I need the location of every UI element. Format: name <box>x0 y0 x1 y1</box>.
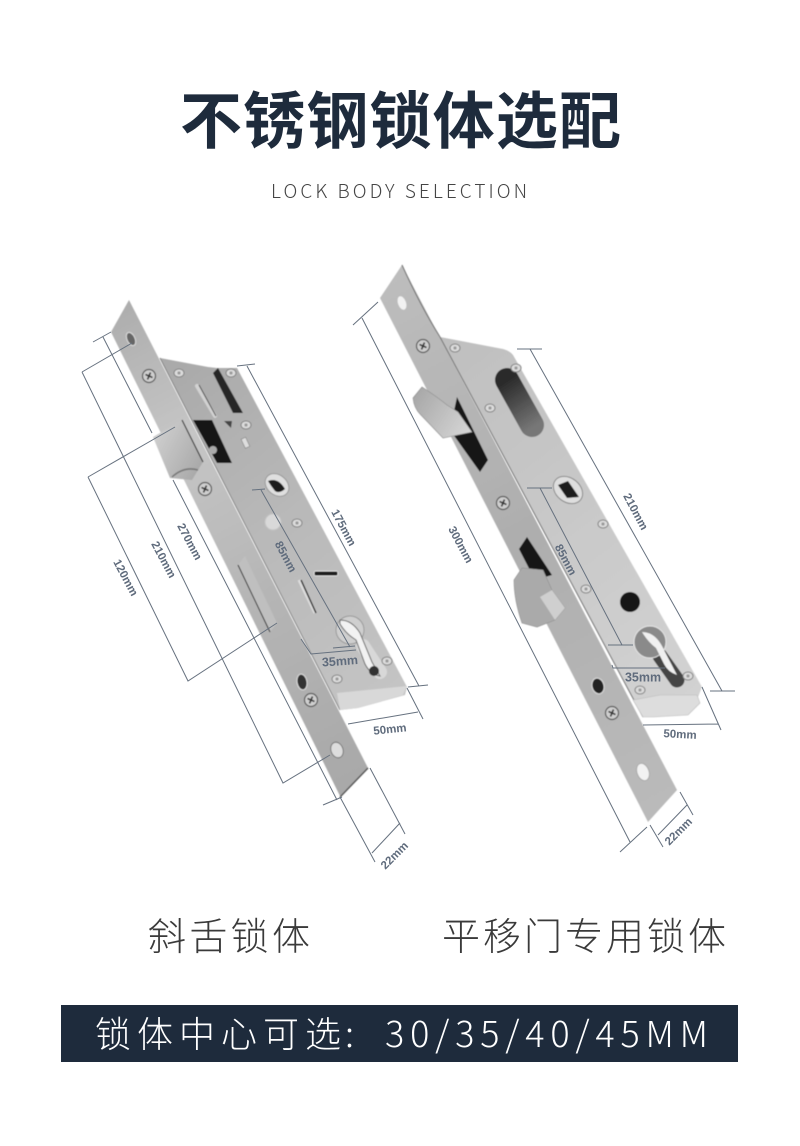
dimension labels: sliding door lock: 210mm <box>620 492 650 532</box>
faceplate holes <box>396 295 408 311</box>
dimension lines: slanted latch lock <box>82 332 428 862</box>
faceplate holes <box>124 331 138 347</box>
banner: center distance options <box>61 1005 738 1062</box>
lower hook window <box>519 537 552 580</box>
dimension labels: slanted latch lock: 175mm <box>328 508 358 548</box>
dimension labels: sliding door lock: 22mm <box>663 816 695 848</box>
dimension labels: sliding door lock: 50mm <box>663 728 697 742</box>
latch window <box>193 420 232 463</box>
banner: center distance options: : <box>345 1006 354 1058</box>
dimension labels: slanted latch lock: 35mm <box>321 653 358 670</box>
small details <box>292 519 302 527</box>
lock body casing <box>440 337 702 717</box>
latch plate recess <box>238 556 277 632</box>
top slot <box>213 368 243 413</box>
thin slot <box>197 386 215 416</box>
caption: sliding door lock body: 平移门专用锁体 <box>442 906 726 961</box>
caption: slanted latch lock body: 斜舌锁体 <box>148 906 310 961</box>
dimension labels: slanted latch lock: 85mm <box>272 540 298 575</box>
long slot <box>299 580 315 613</box>
title: 不锈钢锁体选配 <box>180 88 621 157</box>
seal sticker <box>265 514 281 530</box>
faceplate screws <box>416 340 430 352</box>
subtitle: LOCK BODY SELECTION <box>271 177 527 204</box>
cylinder keyhole <box>634 626 677 680</box>
upper hook window <box>450 397 488 472</box>
dimension labels: slanted latch lock: 210mm <box>148 540 178 580</box>
rectangular slot <box>314 571 338 576</box>
illustration: sliding door lock body <box>380 265 702 822</box>
dimension labels: slanted latch lock: 270mm <box>174 522 204 562</box>
round hole <box>620 592 640 612</box>
dimension lines: sliding door lock <box>353 302 735 852</box>
casing screws <box>450 344 460 352</box>
illustration: slanted latch lock body <box>111 300 407 797</box>
small screw <box>485 404 495 412</box>
dimension labels: slanted latch lock <box>110 508 411 872</box>
dimension labels: slanted latch lock: 22mm <box>379 840 411 872</box>
dimension labels: sliding door lock: 85mm <box>552 543 578 578</box>
banner: center distance options: 锁体中心可选 <box>95 1006 341 1058</box>
banner: center distance options: 30/35/40/45MM <box>385 1006 708 1058</box>
dimension labels: slanted latch lock: 50mm <box>373 722 407 738</box>
bottom end of casing <box>633 695 700 717</box>
latch bolt <box>153 420 203 480</box>
dimension labels: sliding door lock <box>445 492 697 848</box>
dimension labels: sliding door lock: 35mm <box>625 670 661 684</box>
upper hook bolt <box>413 387 472 438</box>
faceplate <box>111 300 368 796</box>
lower hook bolt <box>514 568 565 627</box>
dimension labels: sliding door lock: 300mm <box>445 525 475 565</box>
screws on faceplate <box>142 370 156 382</box>
bottom end of casing <box>337 686 407 710</box>
cylinder keyhole <box>336 616 380 676</box>
dimension labels: slanted latch lock: 120mm <box>110 558 140 598</box>
faceplate <box>380 265 677 822</box>
spindle hole <box>548 471 588 509</box>
oval slot <box>507 380 532 425</box>
lock body casing <box>160 358 407 710</box>
spindle hole <box>261 469 293 501</box>
screws on casing <box>174 369 184 377</box>
